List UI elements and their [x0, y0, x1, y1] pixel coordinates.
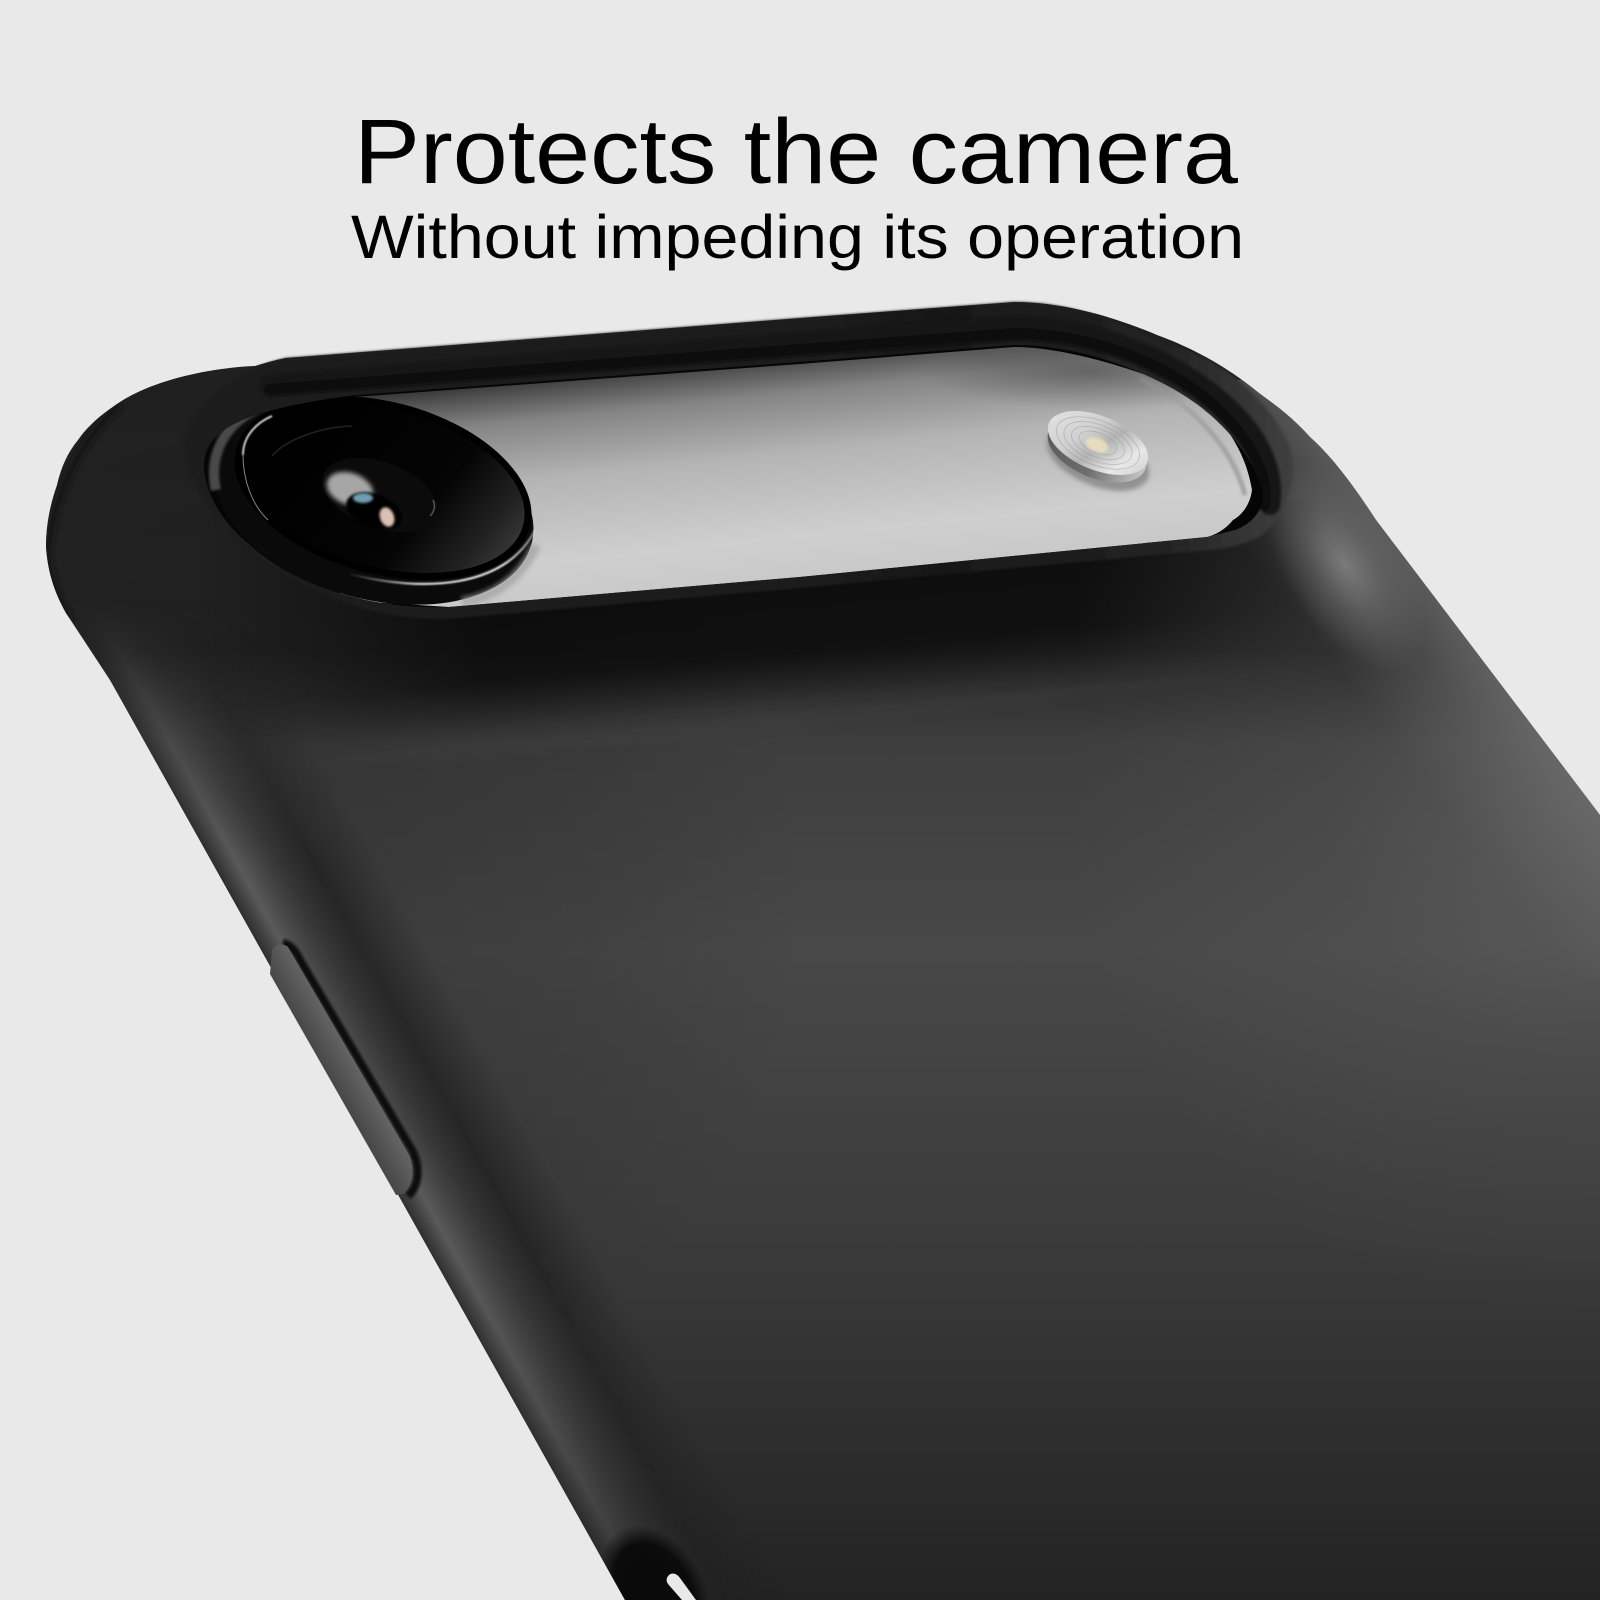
- lens pupil: [344, 490, 401, 528]
- flash face: [1039, 398, 1157, 488]
- lens reflection gray: [324, 468, 376, 508]
- lip band inner: [270, 334, 1265, 505]
- lens barrel: [340, 512, 534, 605]
- left barrel sliver: [214, 410, 255, 490]
- title: Protects the camera: [354, 101, 1239, 203]
- glass inner ring: [272, 426, 352, 456]
- flash shadow: [1037, 412, 1159, 504]
- raised camera lip: [184, 302, 1294, 619]
- flash rings: [1049, 406, 1147, 480]
- silver rim glint: [350, 530, 535, 584]
- camera opening: [204, 345, 1263, 608]
- button groove: [283, 943, 418, 1196]
- flash emitter: [1083, 434, 1111, 456]
- lens reflection pink: [377, 505, 397, 529]
- button cap: [270, 944, 412, 1195]
- camera plate: [340, 347, 1252, 607]
- barrel glow: [462, 545, 536, 602]
- flash side: [1038, 405, 1156, 495]
- subtitle: Without impeding its operation: [351, 203, 1244, 271]
- inner lens: [323, 458, 388, 512]
- lens glass: [388, 451, 524, 573]
- plate edge bevel: [1140, 378, 1245, 495]
- flash: [1037, 398, 1159, 504]
- left thin glint: [243, 455, 268, 520]
- lip band outer: [270, 326, 1271, 505]
- port slot: [667, 1574, 696, 1600]
- main camera lens: [208, 396, 541, 606]
- lens reflection blue: [353, 493, 373, 503]
- side button: [270, 943, 418, 1196]
- plate top shade: [960, 348, 1182, 403]
- charging port: [602, 1529, 704, 1600]
- upper-left glint: [243, 416, 272, 455]
- port recess: [602, 1529, 704, 1600]
- outer black ring: [234, 396, 532, 580]
- inner lens right glint: [430, 500, 434, 516]
- lip inner band: [270, 326, 1271, 505]
